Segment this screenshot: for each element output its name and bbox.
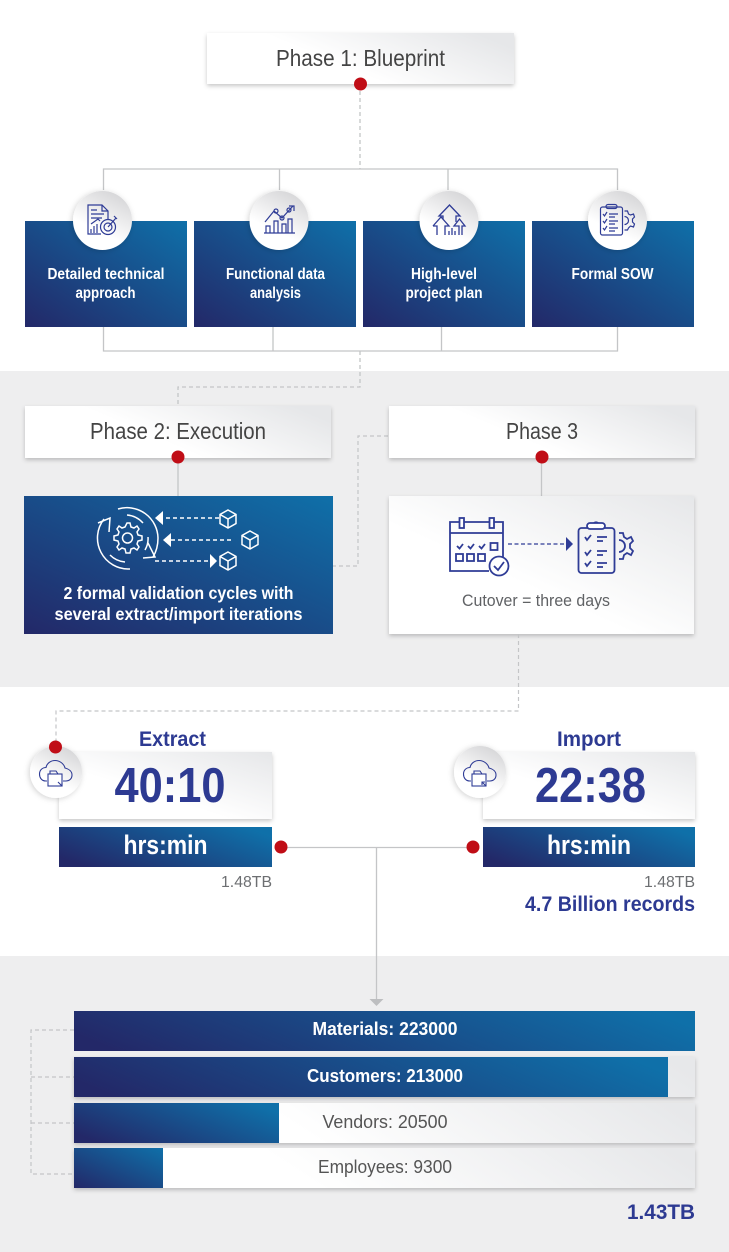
- heading: Phase 2: Phase 2: Execution: [90, 418, 266, 444]
- heading: Phase 1: Phase 1: Blueprint: [276, 45, 446, 71]
- heading: Phase 2: [25, 406, 331, 464]
- text: extract size: 1.48TB: [221, 874, 272, 891]
- panel: extract time: 40:10: [114, 759, 226, 813]
- panel: Functional data analysis: Functional data: [226, 266, 325, 283]
- panel: extract time: [59, 752, 272, 819]
- panel: import time: [483, 752, 695, 819]
- text: total size: 1.43TB: [627, 1201, 695, 1224]
- icon: rising arrows: [420, 191, 478, 250]
- bar: Materials: [74, 1011, 695, 1051]
- panel: High-level project plan: project plan: [406, 285, 482, 302]
- connector: extract and import to records: [274, 840, 480, 1006]
- background band: phases 2 and 3: [0, 371, 729, 687]
- bar: Customers: Customers: 213000: [307, 1066, 463, 1086]
- text: import size: 1.48TB: [644, 874, 695, 891]
- panel: extract unit: hrs:min: [124, 830, 208, 860]
- panel: High-level project plan: High-level: [411, 266, 477, 283]
- bar: Vendors: [74, 1103, 695, 1143]
- panel: import unit: [483, 827, 695, 867]
- heading: Phase 3: Phase 3: [506, 418, 578, 444]
- label: Extract: Extract: [139, 727, 206, 751]
- panel: Functional data analysis: [194, 221, 356, 327]
- connectors: phase 1 to deliverables: [104, 84, 618, 405]
- icon: gear cycle with cubes: [97, 508, 258, 570]
- panel: Formal SOW: [532, 221, 694, 327]
- label: Import: Import: [557, 727, 621, 751]
- icon: document with target: [73, 191, 132, 250]
- text: billion records: 4.7 Billion records: [525, 893, 695, 916]
- bar: Materials: Materials: 223000: [312, 1019, 458, 1039]
- panel: Detailed technical approach: approach: [76, 285, 136, 302]
- panel: Detailed technical approach: Detailed technical: [48, 266, 164, 283]
- bar: Employees: Employees: 9300: [318, 1157, 452, 1177]
- bar: Customers: [74, 1057, 695, 1097]
- connector: phase 3 to extract: [56, 634, 518, 742]
- panel: cutover: [389, 496, 694, 634]
- panel: import time: 22:38: [535, 759, 646, 813]
- panel: High-level project plan: [363, 221, 525, 327]
- connector: phase 3 heading to panel: [540, 457, 542, 496]
- panel: Formal SOW: Formal SOW: [572, 266, 654, 283]
- panel: validation cycles: 2 formal validation cycles with: [64, 583, 294, 603]
- panel: validation cycles: [24, 496, 333, 634]
- panel: validation cycles: several extract/import iterations: [54, 604, 303, 624]
- panel: extract unit: [59, 827, 272, 867]
- heading: Phase 3: [389, 406, 695, 464]
- icon: calendar to checklist: [450, 518, 633, 576]
- background band: record counts: [0, 956, 729, 1252]
- icon: cloud folder extract: [30, 746, 82, 798]
- bar: Vendors: Vendors: 20500: [322, 1112, 448, 1132]
- bar: Employees: [74, 1148, 695, 1188]
- connector: record bars: [31, 1030, 74, 1174]
- panel: Detailed technical approach: [25, 221, 187, 327]
- connector: execution to phase 3: [332, 436, 389, 566]
- marker: extract start: [49, 740, 62, 754]
- icon: chart growth: [250, 191, 308, 250]
- icon: cloud folder import: [454, 746, 506, 798]
- panel: cutover: Cutover = three days: [462, 592, 610, 610]
- panel: Functional data analysis: analysis: [250, 285, 301, 302]
- icon: clipboard with gear: [588, 191, 647, 250]
- panel: import unit: hrs:min: [547, 830, 631, 860]
- connector: phase 2 heading to panel: [177, 457, 179, 496]
- heading: Phase 1: [207, 33, 514, 90]
